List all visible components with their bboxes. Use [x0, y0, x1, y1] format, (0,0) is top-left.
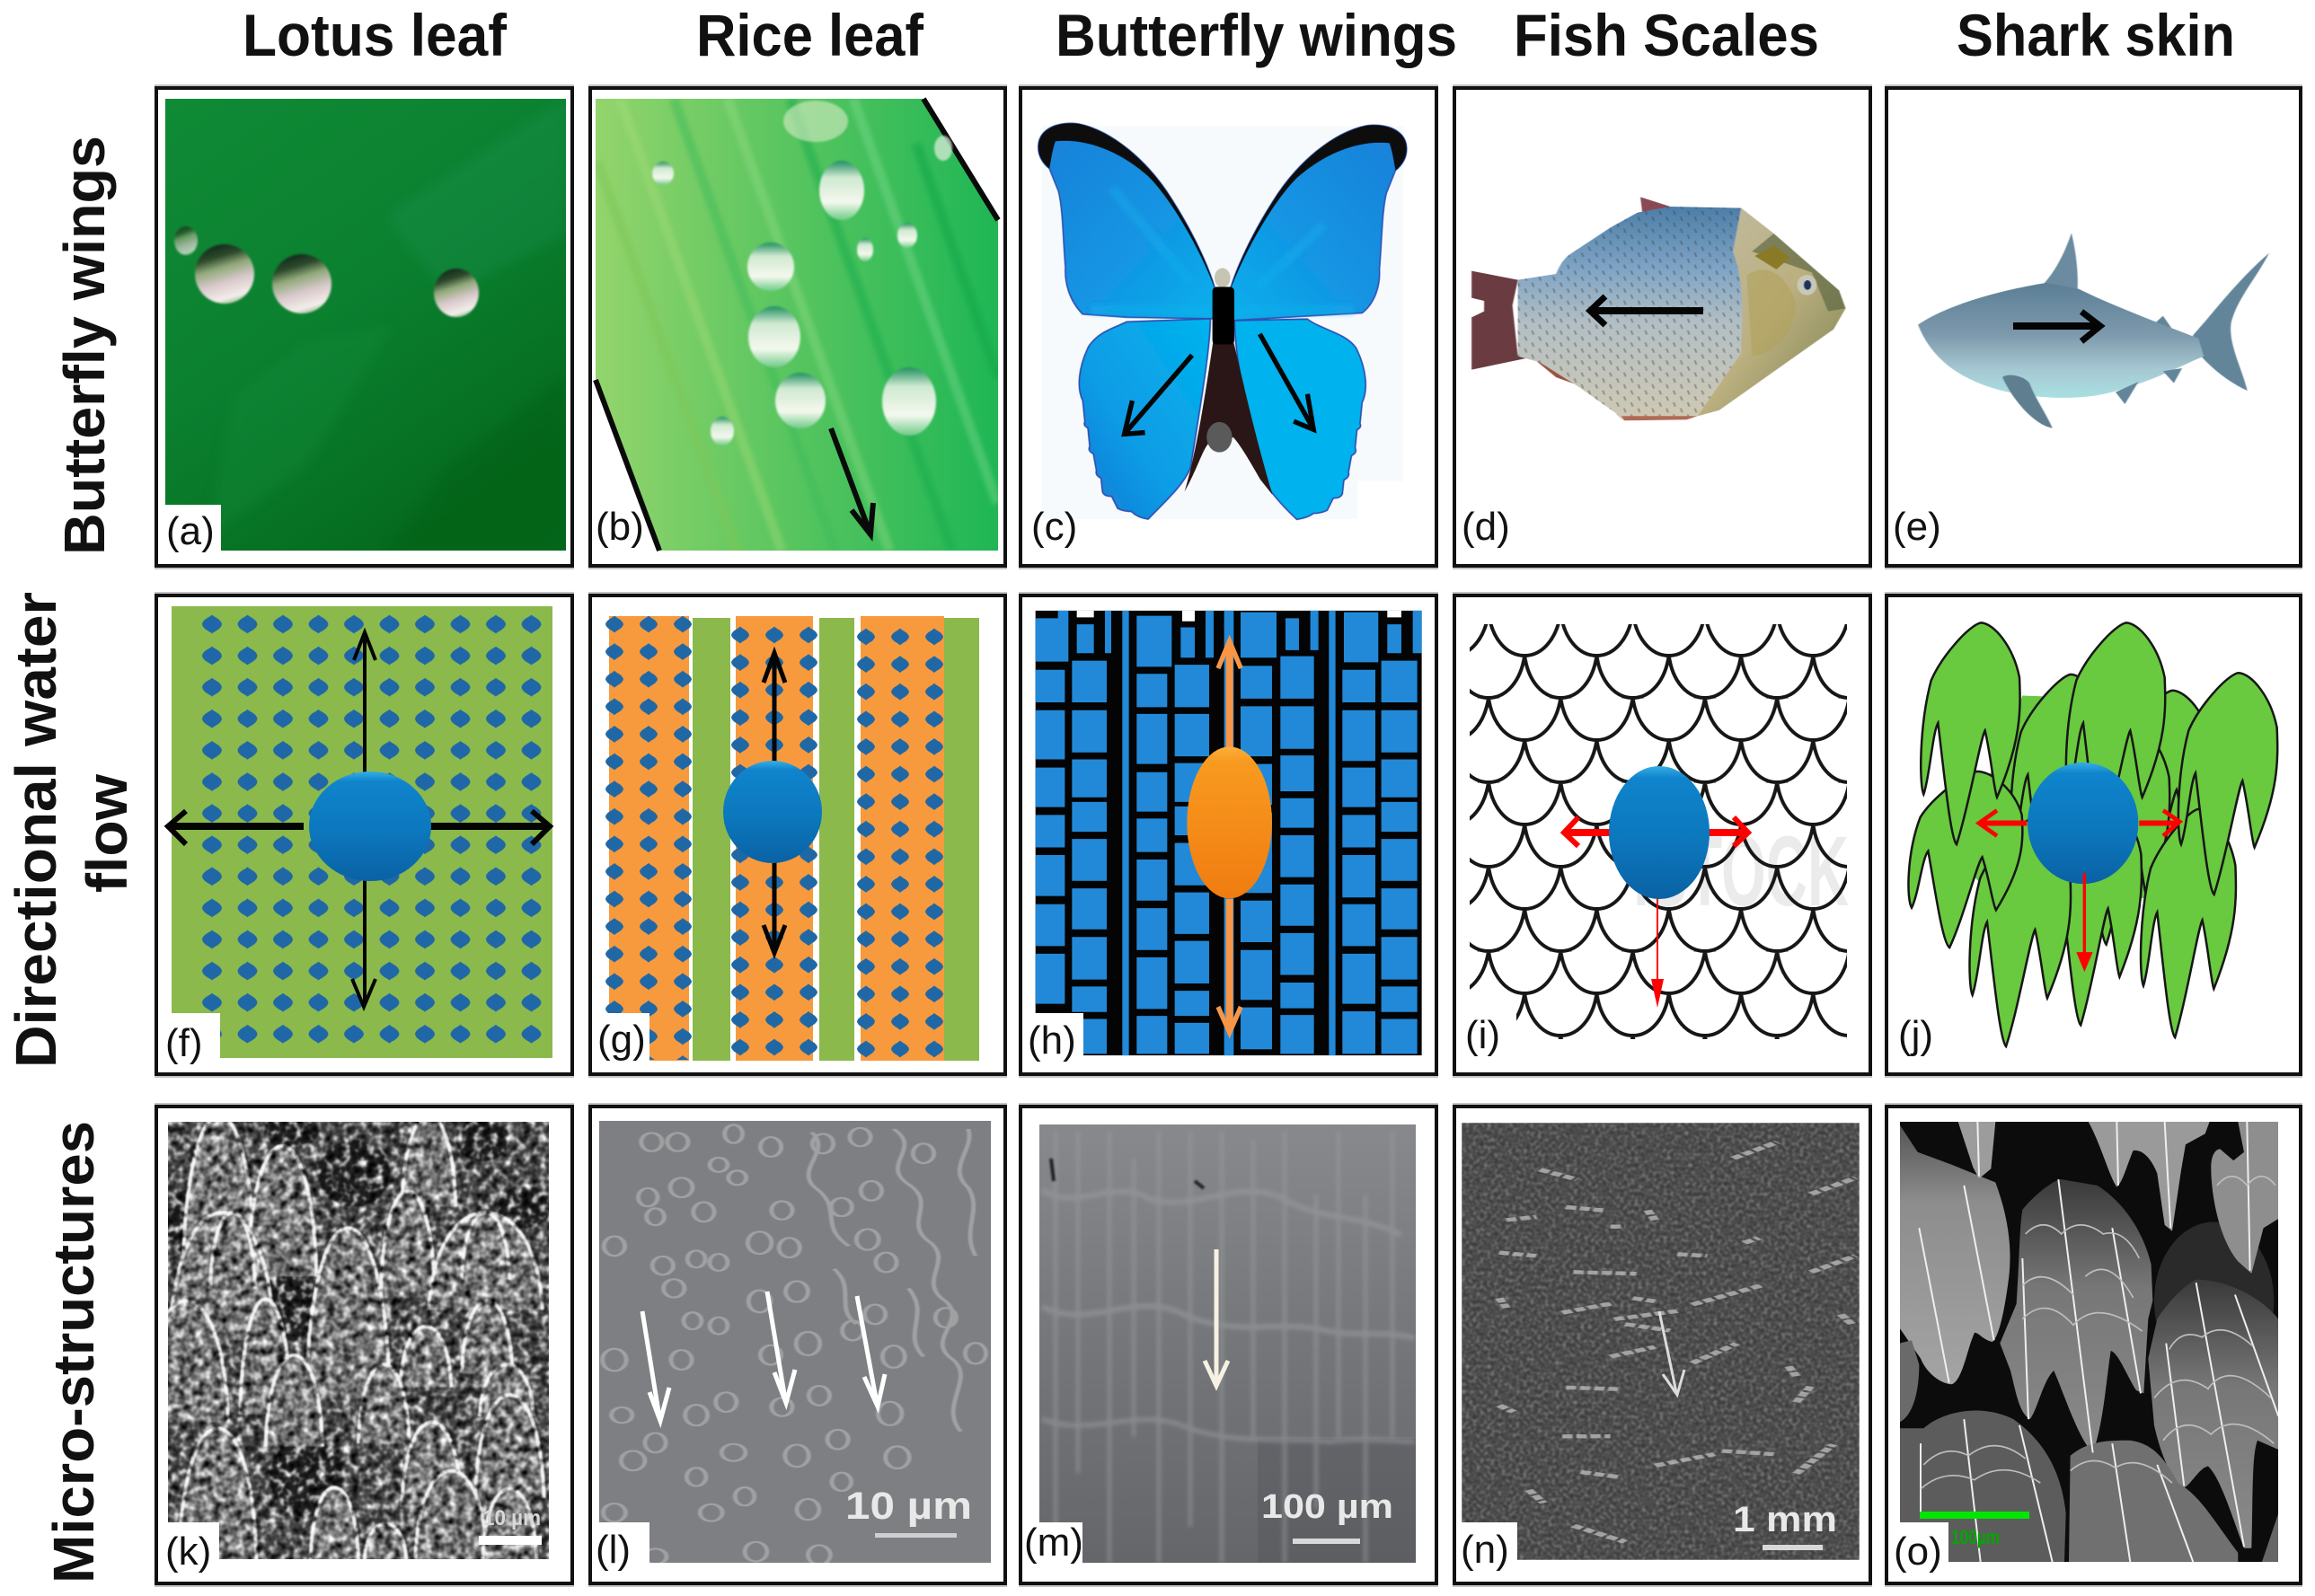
row label: Micro-structures: Micro-structures	[41, 1121, 106, 1583]
panel j: shark skin schematic	[1886, 594, 2301, 1076]
water drop	[723, 761, 822, 863]
scale bar	[1293, 1539, 1360, 1544]
left wings	[1038, 123, 1215, 519]
panel f: lotus leaf water flow schematic	[156, 594, 572, 1076]
denticles	[1900, 1122, 2278, 1562]
row label: Directional water flow: Directional water	[4, 592, 68, 1068]
scale label: 100µm	[1951, 1526, 2000, 1548]
ridges	[1919, 1122, 2278, 1562]
column heading: Butterfly wings: Butterfly wings	[1056, 2, 1457, 68]
scale label: 100 µm	[1261, 1488, 1393, 1526]
scale bar	[875, 1533, 957, 1538]
green surface	[172, 606, 552, 1058]
red arrows	[1979, 810, 2179, 972]
panel c: butterfly photo	[1021, 86, 1436, 568]
row label: Directional water flow: flow	[75, 774, 139, 893]
thin arrow	[1659, 1311, 1684, 1395]
label (l): (l)	[596, 1528, 631, 1572]
green scale bar	[1920, 1512, 2029, 1519]
column heading: Fish Scales: Fish Scales	[1514, 2, 1819, 68]
scale grid	[1036, 611, 1422, 1055]
arrow	[831, 428, 873, 534]
label (b): (b)	[596, 505, 644, 549]
butterfly	[1038, 123, 1407, 519]
right wings	[1230, 125, 1407, 519]
leaf edges	[596, 99, 998, 551]
scale bar	[479, 1536, 542, 1545]
water drop	[309, 772, 431, 881]
label (n): (n)	[1461, 1528, 1509, 1572]
white arrows	[642, 1292, 885, 1421]
orange arrows	[1218, 641, 1241, 1033]
column heading: Lotus leaf: Lotus leaf	[243, 2, 508, 68]
label (o)	[1890, 1522, 1948, 1574]
bright surface flecks	[1499, 1142, 1856, 1542]
arrow	[2013, 312, 2100, 341]
label (j): (j)	[1898, 1013, 1933, 1057]
body	[1185, 268, 1273, 495]
white arrow	[1205, 1249, 1228, 1386]
fish	[1471, 197, 1845, 420]
column heading: Shark skin: Shark skin	[1957, 2, 2235, 68]
label (l)	[596, 1522, 649, 1576]
panel e: shark	[1886, 86, 2301, 568]
panel n: fish scale SEM micrograph	[1454, 1105, 1870, 1585]
column heading: Rice leaf: Rice leaf	[696, 2, 924, 68]
papillae texture	[145, 1113, 552, 1562]
panel d: fish photo	[1454, 86, 1870, 568]
thin red arrow down	[1651, 889, 1664, 1008]
water drop	[2028, 763, 2138, 884]
label (i)	[1464, 995, 1516, 1060]
label (k)	[165, 1522, 219, 1576]
wavy ridges	[808, 1129, 976, 1432]
arrow	[1590, 296, 1703, 325]
orange and green stripes	[609, 616, 979, 1061]
panel m: butterfly wing SEM micrograph	[1021, 1105, 1436, 1585]
scale outlines	[1470, 624, 1847, 1039]
panel g: rice leaf water flow schematic	[590, 594, 1005, 1076]
water drop	[1609, 766, 1710, 899]
papillae rings	[603, 1124, 986, 1565]
scale bar	[1763, 1545, 1823, 1550]
label (m): (m)	[1024, 1521, 1083, 1565]
label (h): (h)	[1028, 1018, 1076, 1063]
row label: Butterfly wings: Butterfly wings	[52, 136, 117, 555]
label (a): (a)	[166, 509, 215, 553]
label (e): (e)	[1893, 505, 1941, 549]
leaf with streaks	[596, 99, 998, 551]
label (g): (g)	[597, 1018, 646, 1062]
label (f)	[165, 1013, 220, 1065]
panel a: lotus leaf photo	[156, 86, 572, 568]
scale label: 1 mm	[1733, 1500, 1837, 1539]
arrows	[764, 653, 785, 953]
label (c): (c)	[1031, 505, 1077, 549]
label (d): (d)	[1462, 505, 1510, 549]
label (k): (k)	[165, 1530, 211, 1574]
row label: Directional water flow	[4, 592, 139, 1068]
leaf surface	[165, 99, 566, 551]
label (f): (f)	[165, 1021, 203, 1065]
dot arrays	[605, 611, 945, 1060]
scale label: 10 µm	[845, 1485, 972, 1528]
orange drop	[1187, 746, 1272, 898]
scale streaks and bands	[1042, 1132, 1415, 1563]
arrows	[1125, 334, 1313, 434]
watermark: iSTOCK	[1633, 816, 1849, 927]
panel b: rice leaf photo	[590, 86, 1005, 568]
wing highlights	[1091, 189, 1355, 310]
panel h: butterfly wing scale schematic	[1021, 594, 1436, 1076]
red arrows sideways	[1564, 817, 1748, 846]
panel o: shark skin SEM micrograph	[1886, 1105, 2301, 1585]
label (h)	[1026, 1013, 1083, 1067]
arrows	[168, 632, 550, 1007]
water droplets	[174, 226, 479, 317]
panel l: rice leaf SEM micrograph	[590, 1105, 1005, 1585]
scale label: 10 µm	[483, 1506, 541, 1530]
label (i): (i)	[1465, 1013, 1500, 1057]
label (o): (o)	[1894, 1530, 1942, 1574]
panel k: lotus leaf SEM micrograph	[145, 1105, 572, 1585]
shark body	[1918, 233, 2269, 428]
water droplets	[652, 101, 952, 445]
dot array	[195, 609, 550, 1049]
panel i: fish scale schematic	[1454, 594, 1870, 1076]
green denticles	[1908, 622, 2277, 1046]
